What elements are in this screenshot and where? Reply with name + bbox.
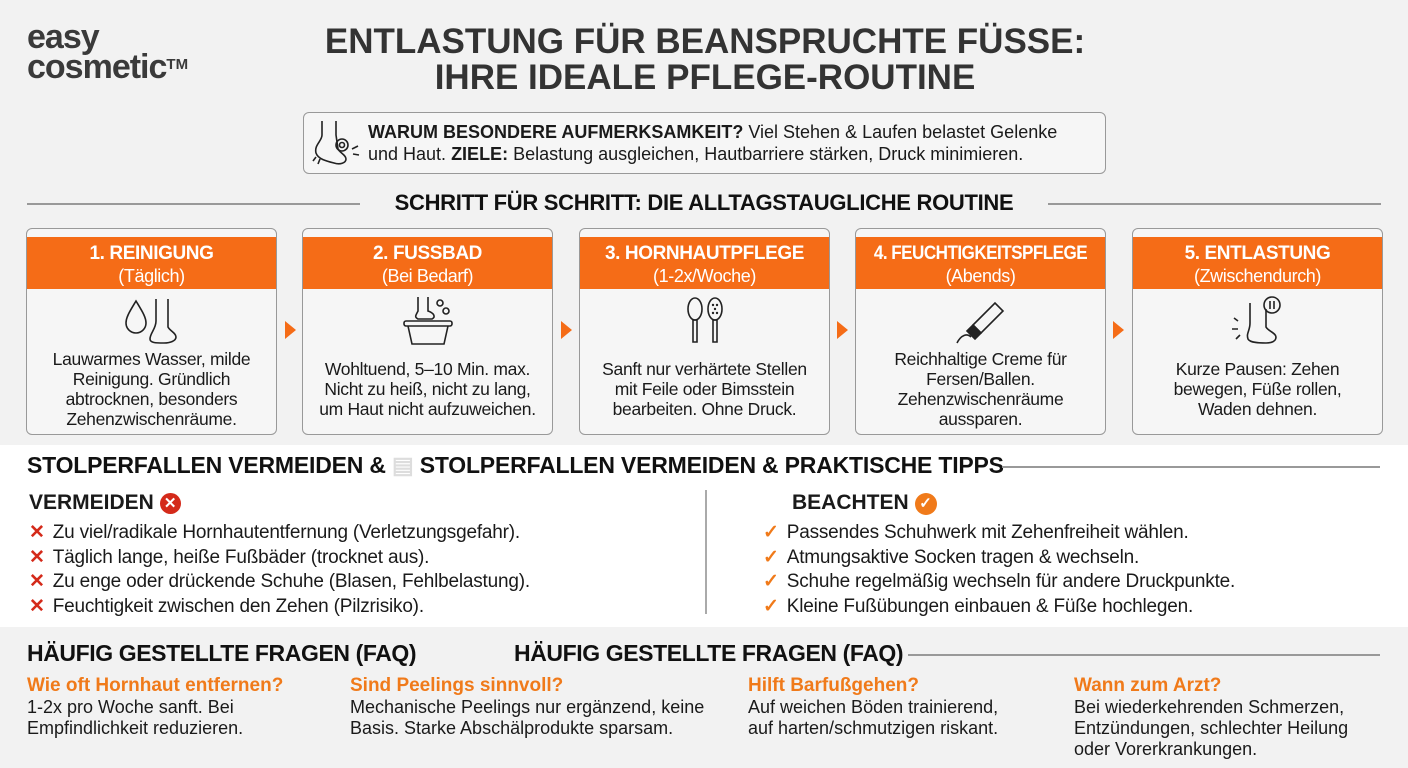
- FAQ 1: 1-2x pro Woche sanft. Bei: [27, 697, 234, 717]
- arrow 2: [561, 321, 572, 339]
- logo: easy: [27, 18, 99, 56]
- logo: [27, 18, 188, 86]
- tips list: ✓ Passendes Schuhwerk mit Zehenfreiheit wählen.: [763, 522, 1189, 543]
- card 2: Wohltuend, 5–10 Min. max.: [325, 359, 530, 379]
- card 1: Zehenzwischenräume.: [66, 409, 237, 429]
- card 1: Lauwarmes Wasser, milde: [53, 349, 250, 369]
- card 1: [26, 228, 277, 435]
- arrow 1: [285, 321, 296, 339]
- FAQ 3: Auf weichen Böden trainierend,: [748, 697, 998, 717]
- title: [325, 22, 1085, 97]
- card 3: mit Feile oder Bimsstein: [615, 379, 794, 399]
- section heading: routine: SCHRITT FÜR SCHRITT: DIE ALLTAGSTAUGLICHE ROUTINE: [395, 190, 1013, 215]
- section heading: pitfalls: STOLPERFALLEN VERMEIDEN & ▤ STOLPERFALLEN VERMEIDEN & PRAKTISCHE TIPPS: [27, 452, 1004, 478]
- white band: [0, 445, 1408, 627]
- icon: file and pumice: [687, 297, 723, 343]
- tips list: [763, 491, 1235, 616]
- FAQ 2: Basis. Starke Abschälprodukte sparsam.: [350, 718, 673, 738]
- card 5: bewegen, Füße rollen,: [1174, 379, 1341, 399]
- card 3: bearbeiten. Ohne Druck.: [613, 399, 796, 419]
- card 1: 1. REINIGUNG: [90, 243, 214, 264]
- intro box: und Haut. ZIELE: Belastung ausgleichen, Hautbarriere stärken, Druck minimieren.: [368, 144, 1023, 164]
- card 5: Kurze Pausen: Zehen: [1176, 359, 1339, 379]
- card 5: Waden dehnen.: [1198, 399, 1317, 419]
- intro box: [303, 112, 1106, 174]
- FAQ 3: [748, 675, 998, 738]
- card 2: 2. FUSSBAD: [373, 243, 482, 264]
- avoid list: [29, 491, 530, 616]
- avoid list: ✕ Feuchtigkeit zwischen den Zehen (Pilzrisiko).: [29, 596, 424, 616]
- title: ENTLASTUNG FÜR BEANSPRUCHTE FÜSSE:: [325, 22, 1085, 61]
- title: IHRE IDEALE PFLEGE-ROUTINE: [435, 58, 975, 97]
- card 2: Nicht zu heiß, nicht zu lang,: [324, 379, 531, 399]
- FAQ 1: Empfindlichkeit reduzieren.: [27, 718, 243, 738]
- card 3: [579, 228, 830, 435]
- card 2: (Bei Bedarf): [382, 266, 473, 286]
- logo: cosmeticTM: [27, 48, 188, 86]
- card 5: (Zwischendurch): [1194, 266, 1321, 286]
- FAQ 4: Bei wiederkehrenden Schmerzen,: [1074, 697, 1344, 717]
- FAQ 3: auf harten/schmutzigen riskant.: [748, 718, 998, 738]
- avoid list: VERMEIDEN: [29, 491, 154, 514]
- tips list: ✓: [919, 495, 932, 512]
- FAQ 4: oder Vorerkrankungen.: [1074, 739, 1257, 759]
- card 4: Zehenzwischenräume: [898, 389, 1063, 409]
- card 5: 5. ENTLASTUNG: [1185, 243, 1330, 264]
- avoid list: ✕ Täglich lange, heiße Fußbäder (trocknet aus).: [29, 546, 429, 568]
- icon: cream tube: [956, 302, 1004, 344]
- FAQ 2: Mechanische Peelings nur ergänzend, keine: [350, 697, 704, 717]
- FAQ 2: [350, 675, 704, 738]
- card 2: [302, 228, 553, 435]
- card 3: 3. HORNHAUTPFLEGE: [605, 243, 804, 264]
- arrow 4: [1113, 321, 1124, 339]
- FAQ 4: Entzündungen, schlechter Heilung: [1074, 718, 1348, 738]
- card 4: [855, 228, 1106, 435]
- tips list: ✓ Atmungsaktive Socken tragen & wechseln.: [763, 546, 1139, 568]
- FAQ 3: Hilft Barfußgehen?: [748, 675, 919, 696]
- tips list: ✓ Schuhe regelmäßig wechseln für andere Druckpunkte.: [763, 571, 1235, 592]
- tips list: BEACHTEN: [792, 491, 909, 514]
- arrow 3: [837, 321, 848, 339]
- icon: drop and foot: [125, 299, 177, 344]
- FAQ 4: [1074, 675, 1348, 759]
- card 4: 4. FEUCHTIGKEITSPFLEGE: [874, 243, 1087, 264]
- text: HÄUFIG GESTELLTE FRAGEN (FAQ): [514, 640, 903, 666]
- card 3: (1-2x/Woche): [653, 266, 756, 286]
- icon: foot pain: [312, 121, 360, 165]
- card 4: Fersen/Ballen.: [926, 369, 1035, 389]
- card 4: (Abends): [946, 266, 1015, 286]
- avoid list: ✕ Zu viel/radikale Hornhautentfernung (Verletzungsgefahr).: [29, 522, 520, 543]
- avoid list: ✕: [164, 495, 176, 512]
- tips list: ✓ Kleine Fußübungen einbauen & Füße hochlegen.: [763, 596, 1193, 616]
- intro box: WARUM BESONDERE AUFMERKSAMKEIT? Viel Stehen & Laufen belastet Gelenke: [368, 122, 1057, 142]
- card 1: (Täglich): [118, 266, 185, 286]
- icon: foot with pause: [1232, 296, 1281, 344]
- FAQ 1: Wie oft Hornhaut entfernen?: [27, 675, 283, 696]
- FAQ 2: Sind Peelings sinnvoll?: [350, 675, 563, 696]
- card 4: Reichhaltige Creme für: [894, 349, 1067, 369]
- FAQ heading: HÄUFIG GESTELLTE FRAGEN (FAQ): [27, 640, 416, 666]
- icon: foot bath: [403, 297, 453, 345]
- card 3: Sanft nur verhärtete Stellen: [602, 359, 807, 379]
- card 5: [1132, 228, 1383, 435]
- card 4: aussparen.: [939, 409, 1022, 429]
- card 1: abtrocknen, besonders: [66, 389, 237, 409]
- avoid list: ✕ Zu enge oder drückende Schuhe (Blasen, Fehlbelastung).: [29, 571, 530, 592]
- FAQ 1: [27, 675, 283, 738]
- card 1: Reinigung. Gründlich: [73, 369, 230, 389]
- card 2: um Haut nicht aufzuweichen.: [319, 399, 536, 419]
- FAQ 4: Wann zum Arzt?: [1074, 675, 1221, 696]
